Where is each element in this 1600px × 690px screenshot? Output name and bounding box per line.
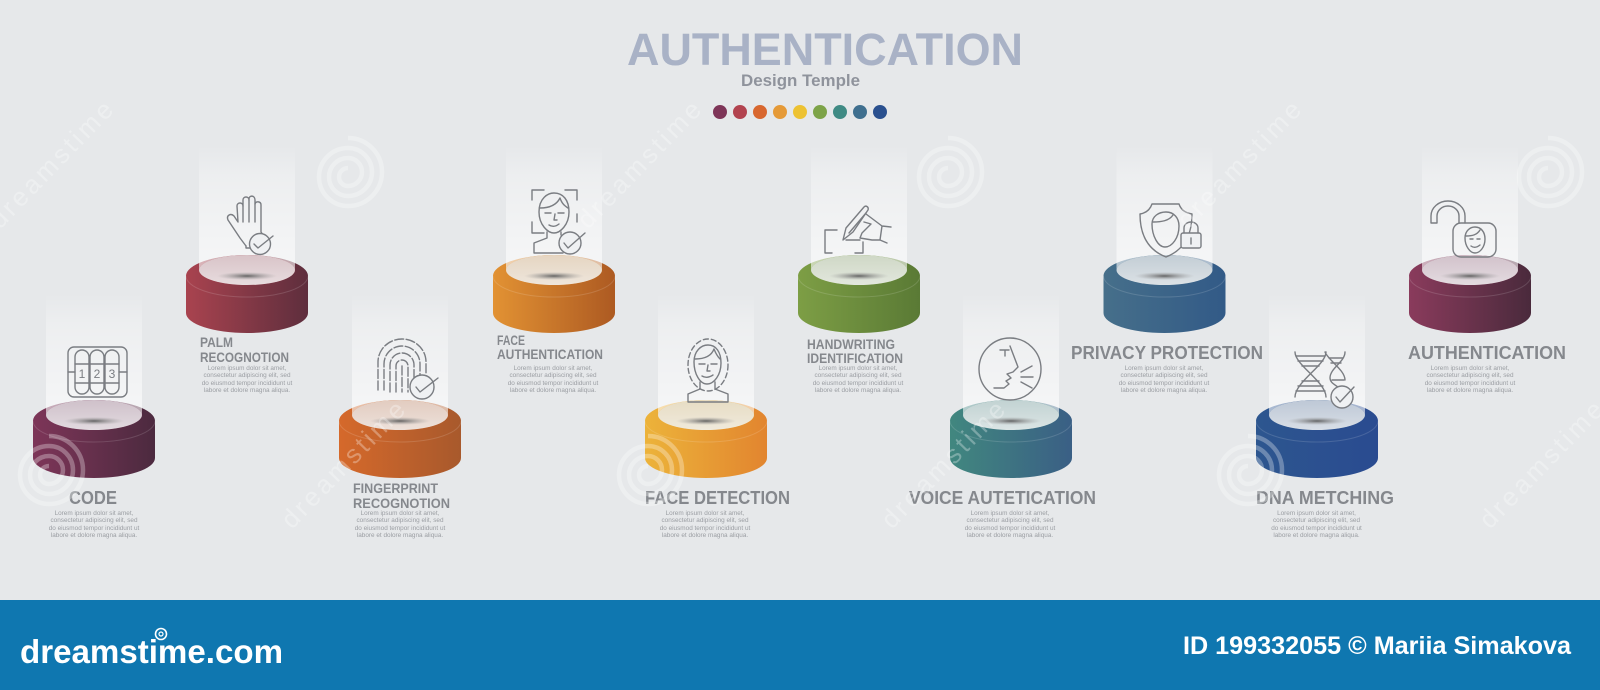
icon: code lock: 1 — [79, 367, 86, 381]
text block: authentication — [1425, 365, 1516, 394]
text block: palm: labore et dolore magna aliqua. — [204, 387, 290, 394]
podium: dna — [1256, 293, 1378, 478]
heading: face detection: FACE DETECTION — [645, 488, 790, 508]
text block: handwriting: consectetur adipiscing elit, sed — [814, 372, 902, 379]
step: handwriting identification — [798, 145, 920, 394]
podium: fingerprint — [339, 293, 461, 478]
text block: handwriting: do eiusmod tempor incididunt ut — [813, 380, 904, 387]
icon: voice — [979, 338, 1041, 400]
text block: voice: do eiusmod tempor incididunt ut — [965, 525, 1056, 532]
heading: fingerprint recognotion: RECOGNOTION — [353, 495, 450, 511]
heading: fingerprint recognotion — [353, 480, 450, 511]
heading: code: CODE — [69, 488, 117, 508]
text block: face detection: Lorem ipsum dolor sit amet, — [666, 510, 745, 517]
icon: handwriting — [825, 206, 891, 253]
icon: face detection — [688, 339, 728, 402]
step: face detection — [645, 293, 790, 539]
text block: privacy — [1119, 365, 1210, 394]
text block: fingerprint: consectetur adipiscing elit, sed — [356, 517, 444, 524]
icon: code lock — [68, 347, 127, 397]
heading: face authentication: FACE — [497, 332, 525, 348]
heading: dna metching: DNA METCHING — [1256, 488, 1394, 508]
text block: authentication: labore et dolore magna aliqua. — [1427, 387, 1513, 394]
text block: face authentication: labore et dolore magna aliqua. — [510, 387, 596, 394]
icon: face scan — [532, 190, 585, 254]
text block: face authentication: do eiusmod tempor incididunt ut — [508, 380, 599, 387]
subtitle: Design Temple — [741, 71, 860, 90]
heading: handwriting identification: HANDWRITING — [807, 336, 895, 352]
icon: palm — [228, 196, 273, 254]
step: privacy protection — [1071, 145, 1263, 394]
podium: face detection — [645, 293, 767, 478]
watermark overlay: dreamstime — [875, 395, 1011, 534]
step: authentication — [1408, 145, 1566, 394]
icon: shield lock — [1140, 204, 1201, 257]
step: fingerprint recognotion — [339, 293, 461, 539]
text block: face detection: labore et dolore magna aliqua. — [662, 532, 748, 539]
footer banner — [0, 600, 1600, 690]
watermark overlay: dreamstime — [571, 95, 707, 234]
icon: unlocked face — [1431, 201, 1496, 257]
podium: code — [33, 293, 155, 478]
text block: dna — [1271, 510, 1362, 539]
heading: palm recognotion — [200, 334, 289, 365]
podium: handwriting — [798, 145, 920, 333]
text block: dna: Lorem ipsum dolor sit amet, — [1277, 510, 1356, 517]
text block: code — [49, 510, 140, 539]
text block: palm: consectetur adipiscing elit, sed — [203, 372, 291, 379]
icon: fingerprint — [378, 339, 438, 399]
heading: authentication: AUTHENTICATION — [1408, 343, 1566, 363]
text block: voice: consectetur adipiscing elit, sed — [966, 517, 1054, 524]
title: AUTHENTICATION — [627, 24, 1023, 75]
icon: dna — [1295, 352, 1354, 408]
watermark overlay — [0, 95, 1600, 534]
text block: code: Lorem ipsum dolor sit amet, — [55, 510, 134, 517]
text block: privacy: labore et dolore magna aliqua. — [1121, 387, 1207, 394]
heading: fingerprint recognotion: FINGERPRINT — [353, 480, 438, 496]
text block: face authentication — [508, 365, 599, 394]
text block: dna: labore et dolore magna aliqua. — [1273, 532, 1360, 539]
text block: voice: Lorem ipsum dolor sit amet, — [971, 510, 1050, 517]
text block: authentication: consectetur adipiscing elit, sed — [1426, 372, 1514, 379]
text block: handwriting: Lorem ipsum dolor sit amet, — [819, 365, 898, 372]
text block: authentication: Lorem ipsum dolor sit amet, — [1431, 365, 1510, 372]
podium: privacy — [1104, 145, 1226, 333]
text block: voice: labore et dolore magna aliqua. — [967, 532, 1053, 539]
text block: palm: do eiusmod tempor incididunt ut — [202, 380, 293, 387]
text block: voice — [965, 510, 1056, 539]
text block: code: labore et dolore magna aliqua. — [51, 532, 137, 539]
text block: fingerprint: Lorem ipsum dolor sit amet, — [361, 510, 440, 517]
step: voice autetication — [909, 293, 1096, 539]
heading: privacy protection: PRIVACY PROTECTION — [1071, 343, 1263, 363]
text block: dna: do eiusmod tempor incididunt ut — [1271, 525, 1362, 532]
footer credit: ID 199332055 © Mariia Simakova — [1183, 632, 1572, 660]
text block: code: consectetur adipiscing elit, sed — [50, 517, 138, 524]
step: code — [33, 293, 155, 539]
heading: face authentication: AUTHENTICATION — [497, 346, 603, 362]
podium: palm — [186, 145, 308, 333]
podium: voice — [950, 293, 1072, 478]
heading: palm recognotion: PALM — [200, 334, 233, 350]
text block: palm: Lorem ipsum dolor sit amet, — [208, 365, 287, 372]
text block: code: do eiusmod tempor incididunt ut — [49, 525, 140, 532]
podium: face authentication — [493, 145, 615, 333]
footer logo: dreamstime.com — [20, 633, 283, 670]
text block: palm — [202, 365, 293, 394]
text block: privacy: consectetur adipiscing elit, sed — [1120, 372, 1208, 379]
text block: fingerprint: do eiusmod tempor incididunt ut — [355, 525, 446, 532]
text block: privacy: do eiusmod tempor incididunt ut — [1119, 380, 1210, 387]
heading: voice autetication: VOICE AUTETICATION — [909, 488, 1096, 508]
text block: face authentication: Lorem ipsum dolor sit amet, — [514, 365, 593, 372]
heading: handwriting identification — [807, 336, 903, 366]
watermark overlay: dreamstime — [1171, 95, 1307, 234]
text block: fingerprint: labore et dolore magna aliqua. — [357, 532, 443, 539]
text block: face detection: consectetur adipiscing elit, sed — [661, 517, 749, 524]
colour dots legend — [713, 105, 887, 119]
step: face authentication — [493, 145, 615, 394]
icon: code lock: 3 — [109, 367, 116, 381]
text block: face detection — [660, 510, 751, 539]
podium: authentication — [1409, 145, 1531, 333]
icon: code lock: 2 — [94, 367, 101, 381]
text block: handwriting — [813, 365, 904, 394]
text block: handwriting: labore et dolore magna aliqua. — [815, 387, 901, 394]
text block: privacy: Lorem ipsum dolor sit amet, — [1125, 365, 1204, 372]
heading: face authentication — [497, 332, 603, 362]
step: palm recognotion — [186, 145, 308, 394]
watermark overlay: dreamstime — [275, 395, 411, 534]
text block: authentication: do eiusmod tempor incididunt ut — [1425, 380, 1516, 387]
heading: palm recognotion: RECOGNOTION — [200, 349, 289, 365]
text block: fingerprint — [355, 510, 446, 539]
text block: face detection: do eiusmod tempor incididunt ut — [660, 525, 751, 532]
step: dna metching — [1256, 293, 1394, 539]
text block: face authentication: consectetur adipiscing elit, sed — [509, 372, 597, 379]
heading: handwriting identification: IDENTIFICATION — [807, 350, 903, 366]
text block: dna: consectetur adipiscing elit, sed — [1273, 517, 1360, 524]
